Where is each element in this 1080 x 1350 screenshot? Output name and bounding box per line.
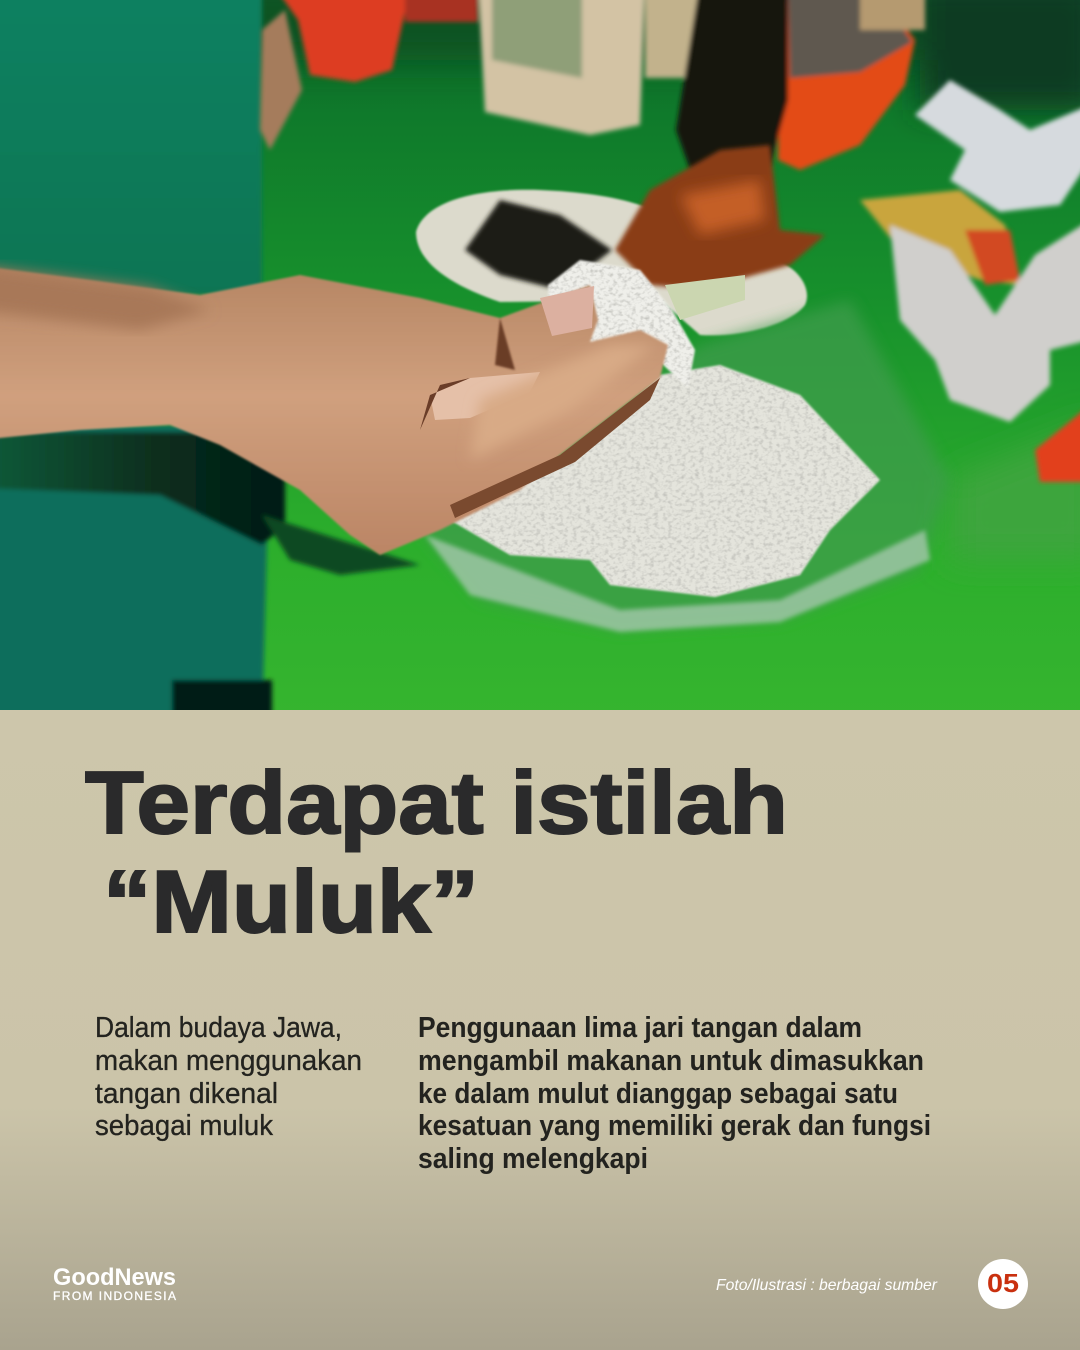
photo: hand taking rice from a plate on a green table	[0, 0, 1080, 710]
tissue and wrappers	[860, 80, 1080, 482]
panel: beige text panel	[0, 710, 1080, 1350]
text block: left paragraph	[95, 1012, 362, 1142]
text block: right paragraph: saling melengkapi	[418, 1143, 648, 1175]
hand and forearm	[0, 266, 668, 555]
logo: GoodNews from Indonesia	[53, 1264, 176, 1303]
title: Terdapat istilah	[85, 753, 788, 852]
rice mound	[440, 360, 890, 600]
text block: left paragraph: makan menggunakan	[95, 1045, 362, 1077]
title	[85, 753, 788, 951]
text block: right paragraph: Penggunaan lima jari tangan dalam	[418, 1012, 862, 1044]
logo: GoodNews from Indonesia: FROM INDONESIA	[53, 1289, 176, 1303]
text block: right paragraph	[418, 1012, 931, 1175]
logo: GoodNews from Indonesia: GoodNews	[53, 1264, 176, 1291]
handful of rice	[546, 258, 696, 386]
page number badge	[978, 1259, 1028, 1309]
green clothing of the diner	[0, 0, 420, 730]
text block: left paragraph: Dalam budaya Jawa,	[95, 1012, 342, 1044]
text block: left paragraph: sebagai muluk	[95, 1110, 273, 1142]
text block: right paragraph: ke dalam mulut dianggap sebagai satu	[418, 1078, 898, 1110]
title: “Muluk”	[103, 852, 479, 951]
back plate with side dishes	[416, 145, 825, 335]
text block: left paragraph: tangan dikenal	[95, 1078, 278, 1110]
page number badge: 05	[987, 1268, 1019, 1298]
background objects	[260, 0, 925, 170]
clear glass plate on the table	[420, 300, 950, 632]
photo credit: Foto/Ilustrasi : berbagai sumber	[716, 1277, 938, 1294]
